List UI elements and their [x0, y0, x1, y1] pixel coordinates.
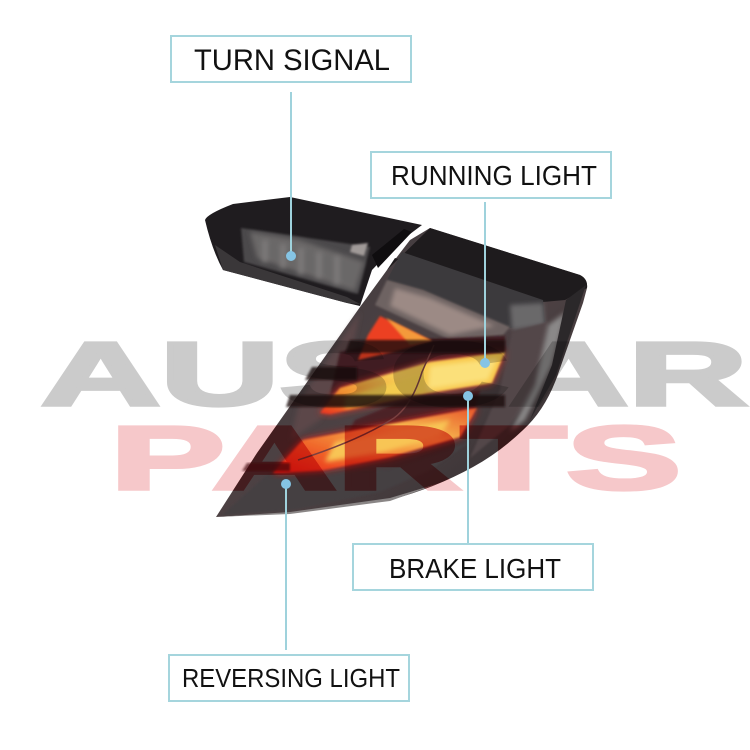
callout: turn signal: TURN SIGNAL — [194, 44, 390, 77]
callout: running light: RUNNING LIGHT — [391, 160, 597, 191]
callout: running light — [371, 152, 611, 368]
boot-lid lamp section — [205, 197, 422, 306]
watermark: PARTS: PARTS — [110, 408, 681, 509]
callout: reversing light — [169, 479, 409, 701]
callout: brake light: BRAKE LIGHT — [389, 553, 561, 584]
quarter panel lamp section — [216, 228, 587, 517]
callout: brake light — [353, 391, 593, 590]
watermark: AUSCAR: AUSCAR — [41, 324, 747, 425]
glowing light bars — [242, 316, 505, 473]
tail light assembly — [205, 197, 587, 517]
watermark darkening over lamp: PARTS — [110, 408, 681, 509]
callout: turn signal — [171, 36, 411, 261]
callout: reversing light: REVERSING LIGHT — [182, 663, 400, 693]
